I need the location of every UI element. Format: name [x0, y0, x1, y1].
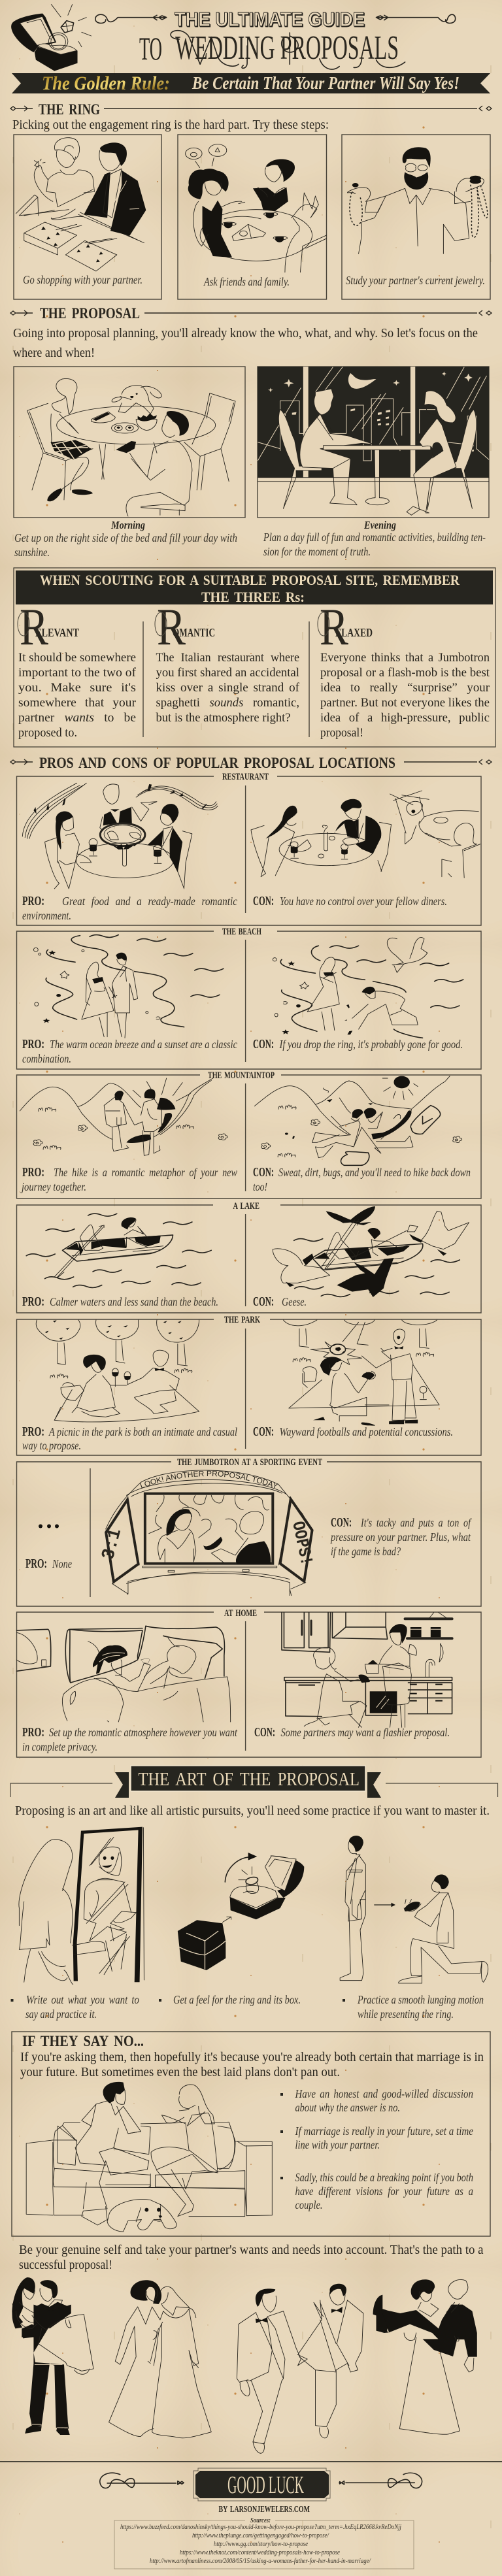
illustration: practice lunge — [340, 1836, 488, 1983]
column: relevant: partner wants to be — [18, 711, 136, 725]
pro text: PRO: — [22, 1165, 44, 1180]
column: romantic: but is the atmosphere right? — [156, 711, 290, 725]
description: Get up on the right side of the bed and fill your day with — [14, 531, 237, 544]
illustration: man carrying bride lower — [12, 2302, 93, 2435]
pro text — [22, 1295, 218, 1309]
pro text — [22, 894, 237, 922]
illustration: beach con — [273, 938, 463, 1038]
con text: CON: — [253, 1295, 274, 1309]
illustration: night dinner — [258, 367, 489, 515]
con text: CON: — [331, 1515, 352, 1530]
intro text: your future. But sometimes even the best laid plans don't pan out. — [20, 2065, 340, 2079]
con text: CON: — [253, 1425, 274, 1439]
con text — [253, 894, 447, 908]
illustration: two brides — [131, 2280, 190, 2315]
column: relaxed: proposal! — [320, 726, 363, 740]
panel: the park — [17, 1315, 481, 1455]
illustration: restaurant pro — [22, 783, 218, 889]
pro text: Calmer waters and less sand than the beach. — [50, 1295, 218, 1308]
bullets: if they say no — [280, 2087, 473, 2211]
illustration: couple on sofa with dog — [26, 2082, 272, 2232]
proposal intro text — [13, 326, 478, 360]
panel: a lake — [17, 1201, 481, 1313]
pro text: in complete privacy. — [22, 1740, 97, 1753]
column: relevant: proposed to. — [18, 726, 77, 740]
pro text — [25, 1557, 72, 1571]
bullets: if they say no: line with your partner. — [295, 2138, 380, 2151]
good luck plaque — [193, 2468, 330, 2501]
proposal intro text: where and when! — [13, 346, 95, 360]
column: relaxed: Everyone thinks that a Jumbotron — [320, 651, 490, 665]
column: relevant: It should be somewhere — [18, 651, 136, 665]
illustration: man carrying bride — [12, 2277, 71, 2338]
bullets: if they say no: about why the answer is no. — [295, 2101, 400, 2114]
panel: at home — [16, 1608, 481, 1757]
caption: Ask friends and family. — [203, 275, 290, 288]
illustration: bearded man with necklaces — [347, 147, 488, 254]
con text — [329, 1515, 472, 1558]
pro text: combination. — [22, 1052, 71, 1065]
illustration: friends at table — [186, 144, 327, 272]
closing text: Be your genuine self and take your partner's wants and needs into account. That's the path to a — [19, 2243, 484, 2257]
column: romantic: spaghetti sounds romantic, — [156, 696, 299, 710]
heading: the ring: THE RING — [39, 101, 100, 118]
label: RESTAURANT — [222, 772, 269, 782]
column: relaxed: proposal or a flash-mob is the best — [320, 666, 490, 680]
con text: CON: — [254, 1725, 275, 1740]
column: relevant: R — [20, 599, 49, 656]
panel: morning — [14, 367, 245, 559]
header band — [16, 570, 493, 605]
description: sion for the moment of truth. — [263, 545, 371, 558]
bullets: if they say no: couple. — [295, 2198, 323, 2211]
con text: It's tacky and puts a ton of — [360, 1516, 472, 1529]
scoreboard text: 3:1 — [99, 1527, 126, 1562]
pro text: PRO: — [25, 1557, 47, 1571]
bullets: if they say no: If marriage is really in your future, set a time — [295, 2124, 473, 2138]
label: Morning — [110, 519, 145, 531]
illustration: shopping couple — [16, 138, 146, 271]
sources box: http://www.artofmanliness.com/2008/05/15/asking-a-womans-father-for-her-hand-in-marriage/ — [150, 2558, 371, 2565]
caption: Go shopping with your partner. — [23, 273, 142, 286]
heading: pros and cons: PROS AND CONS OF POPULAR PROPOSAL LOCATIONS — [39, 755, 395, 771]
pro text: PRO: — [22, 1425, 44, 1439]
description — [14, 531, 237, 559]
con text: If you drop the ring, it's probably gone for good. — [279, 1038, 463, 1051]
illustration: grooms holding hands — [256, 2284, 346, 2312]
illustration: lake pro — [26, 1214, 211, 1287]
illustration: restaurant con — [251, 791, 480, 878]
panel: the three Rs — [14, 568, 495, 747]
column: relaxed: R — [320, 599, 349, 656]
column: relevant: ELEVANT — [35, 626, 79, 639]
title line one: THE ULTIMATE GUIDE — [175, 8, 365, 31]
illustration: park con — [283, 1320, 439, 1426]
pro text — [20, 1165, 237, 1193]
panel: jumbotron — [16, 1457, 482, 1607]
column: relevant: important to the two of — [18, 666, 137, 680]
con text — [253, 1037, 463, 1051]
byline: BY LARSONJEWELERS.COM — [218, 2505, 310, 2515]
panel: restaurant — [17, 772, 481, 925]
con text: CON: — [253, 1037, 274, 1051]
pro text: way to propose. — [22, 1439, 81, 1452]
illustration: two brides lower — [109, 2307, 211, 2438]
bullets: practice tips: say and practice it. — [25, 2007, 97, 2021]
con text: too! — [253, 1180, 267, 1193]
con text: Some partners may want a flashier proposal. — [281, 1726, 450, 1739]
illustration: park pro — [36, 1320, 199, 1422]
closing text: successful proposal! — [19, 2258, 112, 2272]
illustration: jumbotron screen — [106, 1470, 312, 1596]
illustration: mountain con — [254, 1076, 462, 1165]
icon: open ring box — [11, 5, 92, 71]
label: AT HOME — [224, 1608, 257, 1619]
column: relevant — [18, 599, 137, 740]
column: romantic: kiss over a single strand of — [156, 681, 300, 695]
con text: CON: — [253, 894, 274, 908]
pro text: The warm ocean breeze and a sunset are a classic — [50, 1038, 237, 1051]
illustration: ring box opening — [178, 1853, 304, 1970]
divider rule — [0, 2461, 502, 2462]
panel: the mountaintop — [17, 1070, 481, 1198]
title line two: TO — [139, 30, 162, 67]
label: THE JUMBOTRON AT A SPORTING EVENT — [177, 1457, 322, 1468]
header band: WHEN SCOUTING FOR A SUITABLE PROPOSAL SITE, REMEMBER — [40, 572, 460, 588]
label: A LAKE — [233, 1201, 259, 1212]
pro text: Set up the romantic atmosphere however you want — [49, 1726, 238, 1739]
scoreboard text: OOPS! — [287, 1520, 316, 1567]
column: romantic — [155, 599, 300, 725]
pro text: Great food and a ready-made romantic — [62, 895, 237, 908]
panel: evening — [258, 367, 489, 558]
illustration: beach pro — [33, 934, 224, 1038]
con text: Wayward footballs and potential concussions. — [280, 1425, 453, 1438]
con text: if the game is bad? — [331, 1545, 401, 1558]
pro text — [22, 1037, 237, 1065]
golden rule banner: Be Certain That Your Partner Will Say Yes! — [192, 73, 460, 93]
pro text: PRO: — [22, 1037, 44, 1051]
pro text: environment. — [22, 909, 71, 922]
column: romantic: OMANTIC — [173, 626, 215, 639]
closing text — [19, 2243, 484, 2272]
banner: the art of the proposal — [10, 1766, 498, 1798]
sources box: https://www.theknot.com/content/wedding-proposals-how-to-propose — [180, 2549, 340, 2556]
column: relaxed: idea to really “surprise” your — [320, 681, 490, 695]
sources box: Sources: — [250, 2517, 271, 2524]
sources box — [114, 2517, 414, 2569]
jumbotron headline: LOOK! ANOTHER PROPOSAL TODAY — [140, 1470, 278, 1489]
heading: the proposal: THE PROPOSAL — [40, 305, 140, 322]
heading: the ring — [10, 101, 492, 118]
con text — [254, 1725, 450, 1740]
bullets: practice tips — [10, 1993, 484, 2021]
panel: if they say no — [12, 2032, 490, 2236]
column: relevant: somewhere that your — [18, 696, 137, 710]
heading: the proposal — [10, 305, 492, 322]
illustration: breakfast proposal — [27, 378, 235, 516]
intro text — [20, 2050, 484, 2079]
illustration: grooms lower — [237, 2300, 363, 2453]
pro text: None — [52, 1557, 72, 1570]
bullets: practice tips: Write out what you want to — [26, 1993, 139, 2006]
con text: pressure on your partner. Plus, what — [329, 1530, 471, 1544]
golden rule banner — [12, 73, 490, 94]
flourish: left of good luck — [100, 2473, 184, 2488]
proposal intro text: Going into proposal planning, you'll already know the who, what, and why. So let's focus on the — [13, 326, 478, 340]
sources box: http://www.theplunge.com/gettingengaged/how-to-propose/ — [192, 2532, 329, 2539]
con text: You have no control over your fellow diners. — [280, 895, 447, 908]
title line two — [139, 29, 405, 69]
flourish: left and right of title line — [95, 14, 456, 23]
sources box: https://www.buzzfeed.com/danoshinsky/things-you-should-know-before-you-propose?utm_term=.hxEqLR2668.kvReDoNjj — [120, 2524, 401, 2531]
heading: IF THEY SAY NO... — [22, 2033, 144, 2049]
column: romantic: The Italian restaurant where — [156, 651, 299, 665]
con text — [253, 1165, 471, 1193]
sources box: http://www.gq.com/story/how-to-propose — [214, 2541, 308, 2548]
golden rule banner: The Golden Rule: — [42, 73, 170, 94]
description: sunshine. — [14, 546, 50, 559]
header band: THE THREE Rs: — [201, 589, 305, 605]
con text — [253, 1295, 307, 1309]
illustration: kitchen — [282, 1613, 452, 1727]
column: relaxed: ELAXED — [335, 626, 373, 639]
illustration: bedroom — [16, 1626, 231, 1722]
column: relevant: you. Make sure it's — [18, 681, 136, 695]
illustration: lake con — [273, 1206, 469, 1297]
illustration: practicing at mirror — [19, 1827, 144, 1985]
panel: go shopping — [14, 135, 161, 299]
intro text: If you're asking them, then hopefully it's because you're already both certain that marriage is in — [20, 2050, 484, 2064]
banner: the art of the proposal: THE ART OF THE PROPOSAL — [139, 1769, 360, 1790]
con text: Geese. — [282, 1295, 307, 1308]
good luck plaque: GOOD LUCK — [227, 2471, 304, 2499]
ring intro text: Picking out the engagement ring is the hard part. Try these steps: — [12, 118, 329, 132]
pro text: A picnic in the park is both an intimate and casual — [48, 1425, 237, 1438]
pro text: PRO: — [22, 1725, 44, 1740]
illustration: mountain pro — [20, 1078, 227, 1155]
label: THE MOUNTAINTOP — [208, 1070, 275, 1081]
label: Evening — [363, 519, 396, 531]
pro text: PRO: — [22, 1295, 44, 1309]
pro text: PRO: — [22, 894, 44, 908]
illustration: woman carrying groom lower — [399, 2333, 477, 2434]
panel: the beach — [17, 927, 481, 1069]
con text: CON: — [253, 1165, 274, 1180]
column: romantic: R — [157, 599, 186, 656]
illustration: ellipsis — [39, 1524, 59, 1528]
column: romantic: you first shared an accidental — [156, 666, 299, 680]
bullets: practice tips: Get a feel for the ring and its box. — [173, 1993, 301, 2006]
pro text: journey together. — [20, 1180, 86, 1193]
panel: study jewelry — [342, 135, 490, 299]
con text — [253, 1425, 453, 1439]
illustration: woman carrying groom — [373, 2279, 477, 2339]
column: relaxed: idea of a high-pressure, public — [320, 711, 490, 725]
pro text — [22, 1725, 238, 1753]
flourish: right of good luck — [339, 2473, 422, 2488]
pro text — [22, 1425, 237, 1452]
pro text: The hike is a romantic metaphor of your new — [54, 1166, 237, 1179]
label: THE PARK — [224, 1315, 260, 1325]
bullets: practice tips: while presenting the ring. — [358, 2007, 454, 2021]
description — [263, 531, 486, 558]
panel: ask friends — [178, 135, 327, 299]
column: relaxed — [318, 599, 490, 740]
column: relaxed: partner. But not everyone likes the — [320, 696, 490, 710]
label: THE BEACH — [222, 927, 261, 937]
